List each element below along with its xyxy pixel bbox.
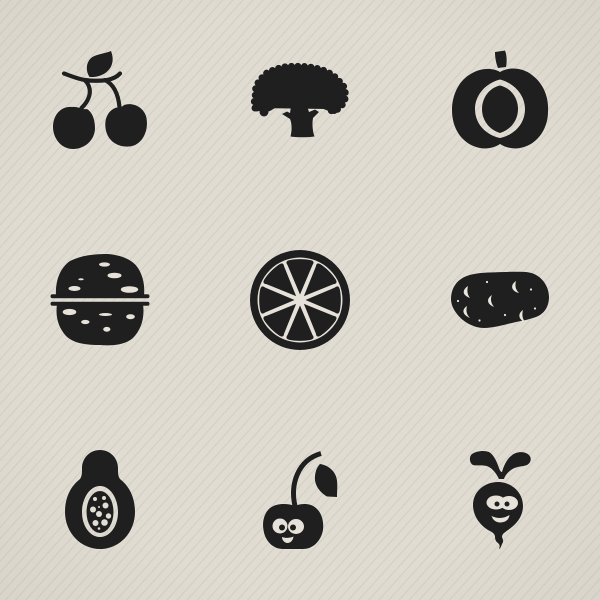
icon: smiling cherry (263, 454, 337, 549)
icon: peach (452, 50, 548, 148)
icon: broccoli (252, 66, 345, 137)
icon: potato (451, 272, 549, 328)
icon: walnut (50, 254, 150, 345)
icon: papaya (65, 450, 135, 549)
icon: cherries (53, 51, 147, 149)
icon: smiling radish (470, 451, 531, 549)
icon: orange slice (250, 250, 350, 350)
